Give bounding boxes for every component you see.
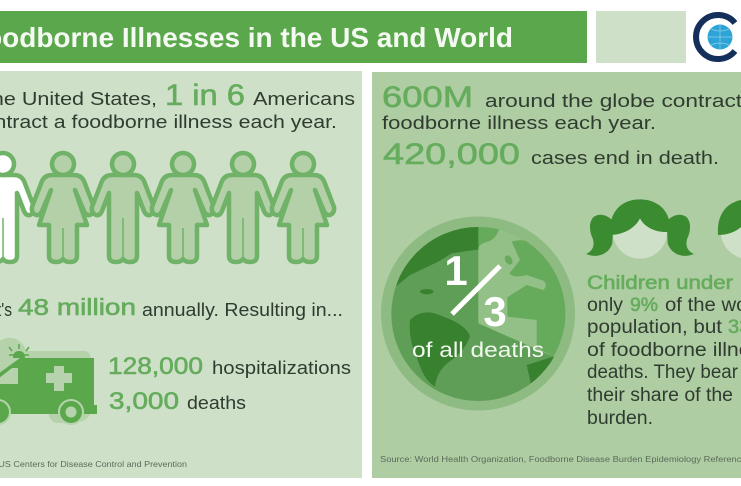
header bar xyxy=(0,11,587,63)
icon: girl face xyxy=(586,199,694,259)
fraction: one third: 1 xyxy=(444,247,468,294)
chart: globe one third of all deaths xyxy=(380,210,580,410)
stat: 420,000: 420,000 xyxy=(383,138,520,171)
text: cases end in death: cases end in death. xyxy=(531,148,719,168)
panel: United States xyxy=(0,71,362,478)
person: man 2 xyxy=(92,153,154,262)
fraction: one third: 3 xyxy=(483,288,507,335)
pictogram: six people xyxy=(0,153,334,262)
stat: 1 in 6: 1 in 6 xyxy=(165,79,245,112)
fraction: one third xyxy=(444,247,507,335)
text: their share of the: their share of the xyxy=(587,385,733,406)
text: Americans: Americans xyxy=(253,89,355,109)
text: burden: burden. xyxy=(587,408,653,429)
panel: world xyxy=(372,72,741,478)
icon: second girl face xyxy=(718,199,741,259)
person: woman 3 xyxy=(272,153,334,262)
panel background: United States xyxy=(0,71,362,478)
stat: 48 million: 48 million xyxy=(18,294,136,320)
stat: 9%: 9% xyxy=(630,295,658,316)
heading: children under 5: Children under xyxy=(587,273,734,294)
stat: 128,000: 128,000 xyxy=(108,353,203,380)
stat: 600M: 600M xyxy=(382,81,473,114)
text: annually: annually. Resulting in... xyxy=(142,300,343,320)
text: hospitalizations: hospitalizations xyxy=(212,358,351,378)
person: woman 2 xyxy=(152,153,214,262)
stat: 3,000: 3,000 xyxy=(109,388,179,415)
header light box xyxy=(596,11,686,63)
person: woman 1 xyxy=(32,153,94,262)
text: foodborne illness each year: foodborne illness each year. xyxy=(382,113,656,133)
text: population but: population, but xyxy=(587,317,723,338)
caption: of all deaths: of all deaths xyxy=(412,339,544,362)
text block: children under 5 xyxy=(587,273,741,429)
text: around the globe: around the globe contract a xyxy=(485,91,741,111)
person: highlighted man xyxy=(0,153,34,262)
text: deaths: deaths xyxy=(187,393,246,413)
person: man 3 xyxy=(212,153,274,262)
source: WHO: Source: World Health Organization, Foodborne Disease Burden Epidemiology Reference Group xyxy=(380,454,741,464)
icon: logo xyxy=(696,15,735,59)
panel background: world xyxy=(372,72,741,478)
text: only: only xyxy=(587,295,624,316)
icon: ambulance xyxy=(0,338,97,424)
